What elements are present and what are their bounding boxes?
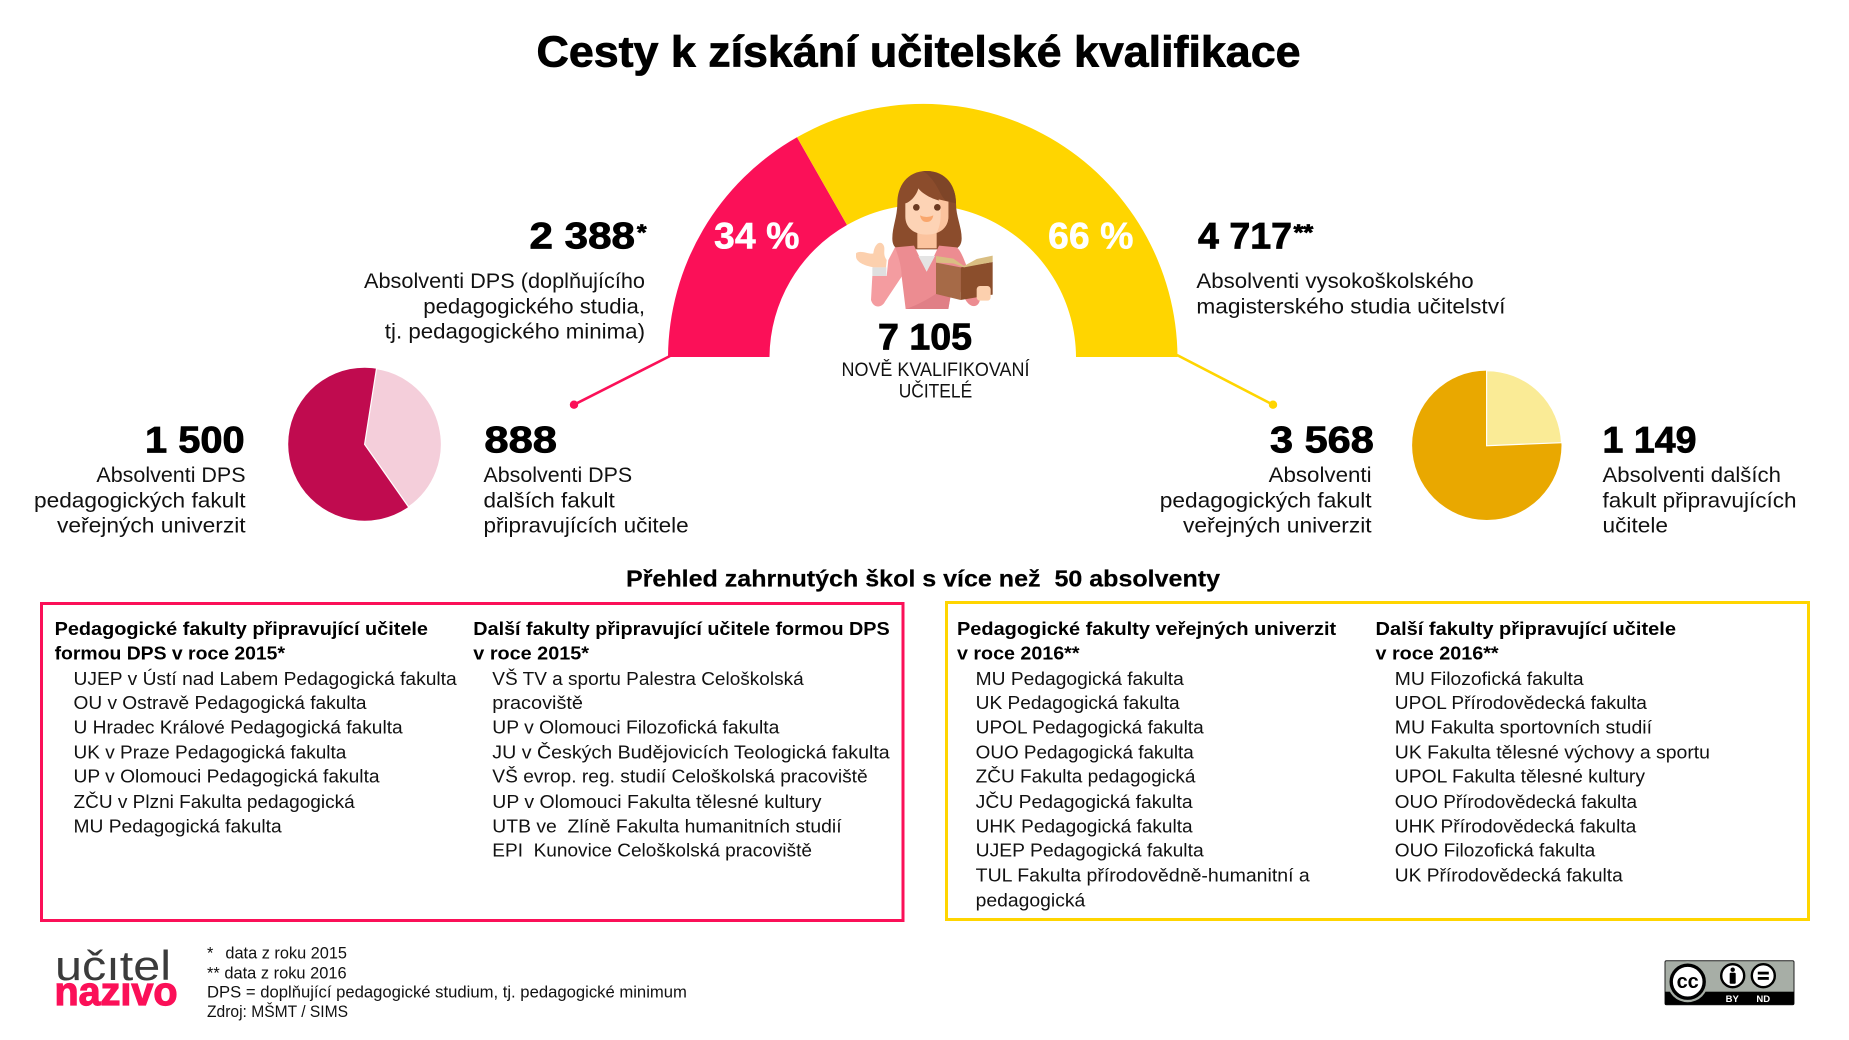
- logo: Učitel nazívo: nazıvo: [54, 970, 178, 1014]
- list: other faculties 2016: UPOL Přírodovědecká fakulta: [1395, 692, 1648, 713]
- list: pedagogical faculties 2015: Pedagogické fakulty připravující učitele: [55, 618, 428, 639]
- icon: Creative Commons BY-ND badge: ND: [1756, 994, 1770, 1005]
- gauge segment: DPS 34 %: [668, 137, 847, 357]
- list: pedagogical faculties 2015: U Hradec Králové Pedagogická fakulta: [74, 717, 403, 738]
- list: pedagogical faculties 2016: UPOL Pedagogická fakulta: [976, 717, 1204, 738]
- total: 7 105 new teachers: UČITELÉ: [899, 381, 972, 403]
- logo: Učitel nazívo: učıtel: [55, 942, 171, 989]
- list: pedagogical faculties 2015: formou DPS v roce 2015*: [55, 643, 286, 664]
- stat: 1 149 at other faculties: [1602, 420, 1796, 538]
- list: other faculties 2016: UK Fakulta tělesné výchovy a sportu: [1395, 742, 1710, 763]
- list: pedagogical faculties 2016: pedagogická: [976, 890, 1086, 911]
- list: pedagogical faculties 2015: [55, 618, 457, 837]
- list: pedagogical faculties 2016: JČU Pedagogická fakulta: [976, 791, 1193, 812]
- footnotes and source: ** data z roku 2016: [207, 965, 347, 983]
- heading: overview of schools: Přehled zahrnutých škol s více než 50 absolventy: [626, 566, 1220, 592]
- list: other faculties 2016: UK Přírodovědecká fakulta: [1395, 865, 1624, 886]
- leader line: yellow, to university breakdown: [1177, 355, 1277, 409]
- stat: 1 500 DPS at public universities: 1 500: [145, 420, 245, 461]
- stat: 2 388 DPS graduates: pedagogického studia,: [423, 294, 645, 318]
- stat: 1 149 at other faculties: fakult připravujících: [1602, 488, 1796, 512]
- label: 66 %: 66 %: [1048, 215, 1134, 256]
- list: pedagogical faculties 2016: MU Pedagogická fakulta: [976, 668, 1185, 689]
- list: pedagogical faculties 2015: ZČU v Plzni Fakulta pedagogická: [74, 791, 355, 812]
- list: other faculties 2016: v roce 2016**: [1376, 643, 1499, 664]
- icon: Creative Commons BY-ND badge: BY: [1726, 994, 1739, 1005]
- logo: Učitel nazívo: [54, 942, 178, 1014]
- list: other faculties 2016: MU Filozofická fakulta: [1395, 668, 1584, 689]
- stat: 1 149 at other faculties: učitele: [1602, 514, 1668, 538]
- list: pedagogical faculties 2015: OU v Ostravě Pedagogická fakulta: [74, 692, 367, 713]
- panel: university schools 2016: [946, 602, 1808, 920]
- list: pedagogical faculties 2016: OUO Pedagogická fakulta: [976, 742, 1195, 763]
- list: pedagogical faculties 2016: Pedagogické fakulty veřejných univerzit: [957, 618, 1336, 639]
- label: 34 %: 34 %: [714, 215, 800, 256]
- list: pedagogical faculties 2015: MU Pedagogická fakulta: [74, 816, 282, 837]
- stat: 1 500 DPS at public universities: Absolventi DPS: [96, 463, 246, 487]
- stat: 4 717 master's graduates: 4 717: [1198, 215, 1292, 256]
- list: pedagogical faculties 2016: UHK Pedagogická fakulta: [976, 816, 1193, 837]
- stat: 888 DPS at other faculties: [484, 420, 689, 538]
- list: pedagogical faculties 2016: TUL Fakulta přírodovědně-humanitní a: [976, 865, 1311, 886]
- stat: 2 388 DPS graduates: 2 388: [530, 215, 635, 256]
- stat: 3 568 at public universities: veřejných univerzit: [1183, 514, 1372, 538]
- icon: teacher holding a book: [856, 171, 993, 309]
- list: other faculties 2015: VŠ evrop. reg. studií Celoškolská pracoviště: [492, 766, 868, 787]
- total: 7 105 new teachers: NOVĚ KVALIFIKOVANÍ: [842, 359, 1030, 381]
- stat: 4 717 master's graduates: [1196, 215, 1505, 318]
- list: other faculties 2015: pracoviště: [492, 692, 583, 713]
- list: other faculties 2015: UP v Olomouci Fakulta tělesné kultury: [492, 791, 822, 812]
- list: other faculties 2015: UTB ve Zlíně Fakulta humanitních studií: [492, 816, 842, 837]
- list: other faculties 2015: Další fakulty připravující učitele formou DPS: [473, 618, 890, 639]
- panel: DPS schools 2015: [42, 604, 903, 920]
- stat: 1 149 at other faculties: Absolventi dalších: [1602, 463, 1781, 487]
- total: 7 105 new teachers: [842, 316, 1030, 403]
- icon: Creative Commons BY-ND badge: [1665, 961, 1794, 1005]
- list: pedagogical faculties 2016: v roce 2016**: [957, 643, 1080, 664]
- list: other faculties 2015: UP v Olomouci Filozofická fakulta: [492, 717, 780, 738]
- list: pedagogical faculties 2016: UJEP Pedagogická fakulta: [976, 840, 1204, 861]
- list: pedagogical faculties 2015: UJEP v Ústí nad Labem Pedagogická fakulta: [74, 668, 457, 689]
- list: other faculties 2016: MU Fakulta sportovních studií: [1395, 717, 1653, 738]
- stat: 3 568 at public universities: 3 568: [1270, 420, 1374, 461]
- icon: Creative Commons BY-ND badge: cc: [1677, 971, 1699, 993]
- stat: 888 DPS at other faculties: Absolventi DPS: [484, 463, 632, 487]
- stat: 1 500 DPS at public universities: veřejných univerzit: [57, 514, 246, 538]
- stat: 888 DPS at other faculties: dalších fakult: [484, 488, 615, 512]
- stat: 2 388 DPS graduates: tj. pedagogického minima): [385, 320, 645, 344]
- stat: 3 568 at public universities: pedagogických fakult: [1160, 488, 1372, 512]
- stat: 4 717 master's graduates: **: [1294, 220, 1314, 245]
- stat: 2 388 DPS graduates: *: [637, 220, 647, 245]
- stat: 1 500 DPS at public universities: [34, 420, 246, 538]
- stat: 1 500 DPS at public universities: pedagogických fakult: [34, 488, 246, 512]
- footnotes and source: [207, 945, 687, 1021]
- footnotes and source: *: [207, 945, 214, 963]
- stat: 4 717 master's graduates: Absolventi vysokoškolského: [1196, 269, 1474, 293]
- list: other faculties 2016: OUO Přírodovědecká fakulta: [1395, 791, 1638, 812]
- list: other faculties 2016: OUO Filozofická fakulta: [1395, 840, 1596, 861]
- stat: 3 568 at public universities: Absolventi: [1269, 463, 1372, 487]
- list: pedagogical faculties 2016: UK Pedagogická fakulta: [976, 692, 1180, 713]
- list: other faculties 2016: UPOL Fakulta tělesné kultury: [1395, 766, 1646, 787]
- title: Cesty k získání učitelské kvalifikace: [536, 28, 1300, 77]
- list: pedagogical faculties 2015: UP v Olomouci Pedagogická fakulta: [74, 766, 380, 787]
- footnotes and source: DPS = doplňující pedagogické studium, tj. pedagogické minimum: [207, 984, 687, 1002]
- list: pedagogical faculties 2016: [957, 618, 1336, 911]
- stat: 888 DPS at other faculties: připravujících učitele: [484, 514, 689, 538]
- stat: 4 717 master's graduates: magisterského studia učitelství: [1196, 294, 1505, 318]
- list: other faculties 2015: [473, 618, 890, 861]
- stat: 1 149 at other faculties: 1 149: [1602, 420, 1696, 461]
- list: other faculties 2015: v roce 2015*: [473, 643, 590, 664]
- list: other faculties 2016: [1376, 618, 1710, 886]
- pie chart: master's split: [1412, 371, 1562, 520]
- list: other faculties 2015: VŠ TV a sportu Palestra Celoškolská: [492, 668, 804, 689]
- footnotes and source: Zdroj: MŠMT / SIMS: [207, 1002, 348, 1021]
- footnotes and source: data z roku 2015: [225, 945, 347, 963]
- pie chart: DPS split: [288, 368, 441, 521]
- list: other faculties 2016: UHK Přírodovědecká fakulta: [1395, 816, 1637, 837]
- stat: 888 DPS at other faculties: 888: [484, 420, 557, 461]
- stat: 2 388 DPS graduates: [364, 215, 647, 344]
- list: other faculties 2015: JU v Českých Budějovicích Teologická fakulta: [492, 742, 890, 763]
- list: other faculties 2015: EPI Kunovice Celoškolská pracoviště: [492, 840, 812, 861]
- stat: 2 388 DPS graduates: Absolventi DPS (doplňujícího: [364, 269, 645, 293]
- list: other faculties 2016: Další fakulty připravující učitele: [1376, 618, 1676, 639]
- list: pedagogical faculties 2016: ZČU Fakulta pedagogická: [976, 766, 1196, 787]
- list: pedagogical faculties 2015: UK v Praze Pedagogická fakulta: [74, 742, 347, 763]
- total: 7 105 new teachers: 7 105: [878, 316, 972, 357]
- stat: 3 568 at public universities: [1160, 420, 1374, 538]
- chart: half-donut gauge of new teachers: [668, 104, 1178, 357]
- gauge segment: magisterské studium 66 %: [797, 104, 1178, 357]
- leader line: pink, to DPS breakdown: [570, 356, 670, 409]
